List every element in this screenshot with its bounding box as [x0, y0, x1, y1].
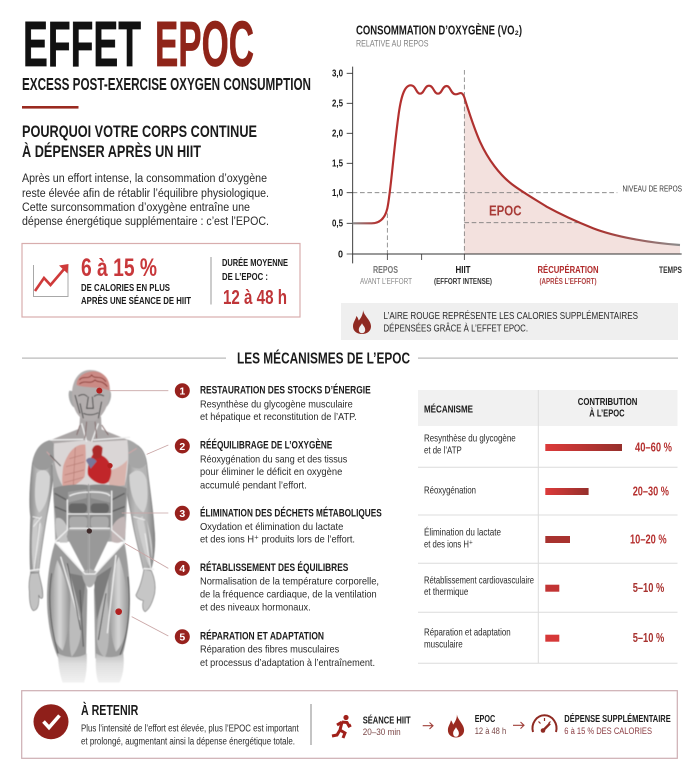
icon: rising chart	[34, 264, 68, 296]
row 4: et thermique	[424, 586, 468, 598]
y axis labels: 1,0	[332, 188, 343, 199]
mechanism 4: RÉTABLISSEMENT DES ÉQUILIBRES	[200, 561, 348, 574]
step: séance: 20–30 min	[363, 727, 401, 738]
quadriceps	[51, 560, 69, 651]
table header: MÉCANISME	[424, 402, 473, 415]
line chart: VO2	[332, 67, 682, 286]
ears	[69, 391, 111, 407]
groin	[82, 569, 97, 587]
neck and shoulders	[51, 417, 128, 447]
accent rule	[22, 106, 78, 109]
mechanism 4: 4	[179, 563, 185, 575]
heading: pourquoi	[22, 123, 257, 161]
chart heading	[356, 22, 522, 50]
mechanism 5: RÉPARATION ET ADAPTATION	[200, 629, 324, 642]
x axis labels: AVANT L’EFFORT	[360, 277, 412, 286]
title: EPOC	[155, 8, 254, 80]
arms	[30, 442, 155, 573]
takeaway text: Plus l’intensité de l’effort est élevée, plus l’EPOC est important	[81, 724, 299, 735]
y axis labels: 1,5	[332, 158, 343, 170]
mechanism 5: et processus d’adaptation à l’entraînement.	[200, 657, 375, 669]
icon: gauge	[532, 715, 556, 733]
table header	[424, 396, 637, 420]
hands	[29, 573, 43, 611]
title: EFFET	[23, 8, 141, 80]
mechanism 3	[175, 506, 382, 546]
stat: duration: DURÉE MOYENNE	[222, 256, 288, 269]
step: séance	[363, 713, 411, 738]
x axis labels: TEMPS	[659, 265, 682, 276]
row 3: 10–20 %	[630, 532, 667, 547]
mechanism 3: ÉLIMINATION DES DÉCHETS MÉTABOLIQUES	[200, 506, 382, 519]
icon: flame	[353, 310, 371, 334]
step: dépense: 6 à 15 % DES CALORIES	[564, 726, 652, 737]
mechanism 2: RÉÉQUILIBRAGE DE L’OXYGÈNE	[200, 439, 332, 452]
stat: calories	[81, 254, 191, 307]
x axis labels: (EFFORT INTENSE)	[434, 277, 492, 286]
knees and shins	[58, 653, 87, 683]
section heading: mécanismes: LES MÉCANISMES DE L’EPOC	[237, 350, 410, 368]
table: contribution	[418, 390, 678, 663]
stat: calories: APRÈS UNE SÉANCE DE HIIT	[81, 294, 191, 307]
stat: duration: 12 à 48 h	[223, 287, 287, 309]
intro paragraph: Après un effort intense, la consommation d’oxygène	[22, 173, 267, 185]
row 5: musculaire	[424, 639, 463, 651]
mechanism 5: Réparation des fibres musculaires	[200, 644, 339, 656]
subtitle: EXCESS POST-EXERCISE OXYGEN CONSUMPTION	[22, 74, 311, 94]
step: epoc: EPOC	[475, 713, 495, 725]
mechanism 1: RESTAURATION DES STOCKS D’ÉNERGIE	[200, 383, 371, 396]
mechanism 3: Oxydation et élimination du lactate	[200, 521, 343, 533]
panel: à retenir	[22, 691, 677, 758]
leader lines	[109, 391, 168, 636]
table header: CONTRIBUTION	[578, 396, 637, 408]
row 1: et de l’ATP	[424, 444, 462, 456]
heart	[88, 452, 111, 484]
mechanism 4	[175, 561, 379, 614]
mechanism 4: de la fréquence cardiaque, de la ventilation	[200, 589, 377, 601]
x axis labels: (APRÈS L’EFFORT)	[540, 277, 597, 286]
mechanism 5: 5	[179, 632, 185, 644]
mechanism 2	[175, 438, 347, 491]
stat: calories: DE CALORIES EN PLUS	[81, 283, 170, 294]
arrow	[423, 722, 433, 729]
row 4: 5–10 %	[633, 580, 665, 595]
mechanism 2: accumulé pendant l’effort.	[200, 479, 307, 491]
head	[72, 370, 110, 421]
torso base	[52, 440, 128, 542]
mechanism 2: Réoxygénation du sang et des tissus	[200, 453, 347, 465]
marker dots	[87, 388, 122, 615]
chart heading: RELATIVE AU REPOS	[356, 38, 428, 50]
row 3	[424, 526, 667, 550]
mechanism 2: pour éliminer le déficit en oxygène	[200, 466, 342, 478]
mechanism 3: et des ions H⁺ produits lors de l’effort.	[200, 534, 355, 546]
y axis labels: 3,0	[332, 68, 343, 80]
stat: duration: DE L’EPOC :	[222, 272, 268, 283]
x axis labels: HIIT	[456, 265, 470, 276]
panel: key stats	[22, 244, 300, 317]
row 1: 40–60 %	[635, 440, 672, 455]
step: séance: SÉANCE HIIT	[363, 713, 411, 726]
thighs	[47, 543, 87, 658]
takeaway text: et prolongé, augmentant ainsi la dépense énergétique totale.	[81, 736, 295, 747]
row 5	[424, 627, 665, 651]
mechanism 2: 2	[179, 441, 185, 453]
y axis labels: 0,5	[332, 218, 343, 230]
mechanism 4: et des niveaux hormonaux.	[200, 602, 311, 614]
deltoids	[33, 440, 57, 470]
intro paragraph: dépense énergétique supplémentaire : c’est l’EPOC.	[22, 216, 269, 228]
y axis labels: 2,5	[332, 98, 343, 110]
row 2: 20–30 %	[633, 484, 669, 499]
anatomical body figure	[29, 370, 168, 683]
intro paragraph: Cette surconsommation d’oxygène entraîne une	[22, 202, 250, 214]
y axis labels: 0	[338, 250, 343, 260]
abs	[53, 485, 127, 528]
wrist bands	[30, 569, 154, 571]
table header: À L’EPOC	[589, 407, 625, 420]
y axis labels	[332, 68, 343, 260]
chart heading: CONSOMMATION D’OXYGÈNE (VO₂)	[356, 22, 522, 38]
mechanism 1: et hépatique et reconstitution de l’ATP.	[200, 411, 357, 423]
intro paragraph	[22, 173, 269, 228]
y axis labels: 2,0	[332, 128, 343, 140]
mechanism 1: 1	[179, 386, 185, 398]
mechanism 4: Normalisation de la température corporelle,	[200, 576, 379, 588]
EPOC area label: EPOC	[489, 202, 522, 220]
row 1: Resynthèse du glycogène	[424, 433, 516, 445]
mechanism 1: Resynthèse du glycogène musculaire	[200, 398, 353, 410]
row 4	[424, 574, 665, 598]
heading: pourquoi: À DÉPENSER APRÈS UN HIIT	[22, 142, 201, 161]
lower abdomen	[67, 531, 110, 572]
row 5: Réparation et adaptation	[424, 627, 511, 639]
biceps and forearm highlights	[35, 470, 50, 513]
chest	[54, 440, 128, 487]
EPOC shaded area	[464, 97, 680, 254]
x axis labels: RÉCUPÉRATION	[538, 263, 598, 276]
mechanism list	[175, 383, 382, 669]
x axis labels	[360, 263, 682, 286]
x axis labels: REPOS	[373, 265, 398, 276]
icon: flame	[448, 714, 464, 738]
step: epoc	[475, 713, 506, 737]
takeaway text: À RETENIR	[81, 702, 138, 719]
lung	[62, 445, 86, 489]
callout: red area note: DÉPENSÉES GRÂCE À L’EFFET EPOC.	[384, 322, 528, 334]
step: epoc: 12 à 48 h	[475, 726, 506, 737]
row 2	[424, 484, 669, 499]
step: dépense	[564, 712, 671, 737]
obliques	[55, 518, 67, 543]
mechanism 1	[175, 383, 371, 423]
tendon lines	[50, 423, 130, 633]
takeaway text	[81, 702, 299, 747]
arrow	[513, 722, 524, 729]
stat: duration	[222, 256, 288, 309]
VO2 curve	[353, 85, 680, 245]
mechanism 3: 3	[179, 508, 185, 520]
row 5: 5–10 %	[633, 630, 665, 645]
heading: pourquoi: POURQUOI VOTRE CORPS CONTINUE	[22, 123, 257, 141]
callout: red area note	[341, 303, 678, 340]
stat: calories: 6 à 15 %	[81, 254, 157, 282]
row 4: Rétablissement cardiovasculaire	[424, 574, 534, 586]
icon: runner	[332, 715, 351, 738]
intro paragraph: reste élevée afin de rétablir l’équilibre physiologique.	[22, 188, 269, 200]
row 2: Réoxygénation	[424, 484, 476, 496]
row 3: et des ions H⁺	[424, 538, 473, 550]
row 3: Élimination du lactate	[424, 526, 501, 539]
mechanism 5	[175, 629, 375, 669]
row 1	[424, 433, 672, 456]
icon: check badge	[34, 704, 68, 739]
